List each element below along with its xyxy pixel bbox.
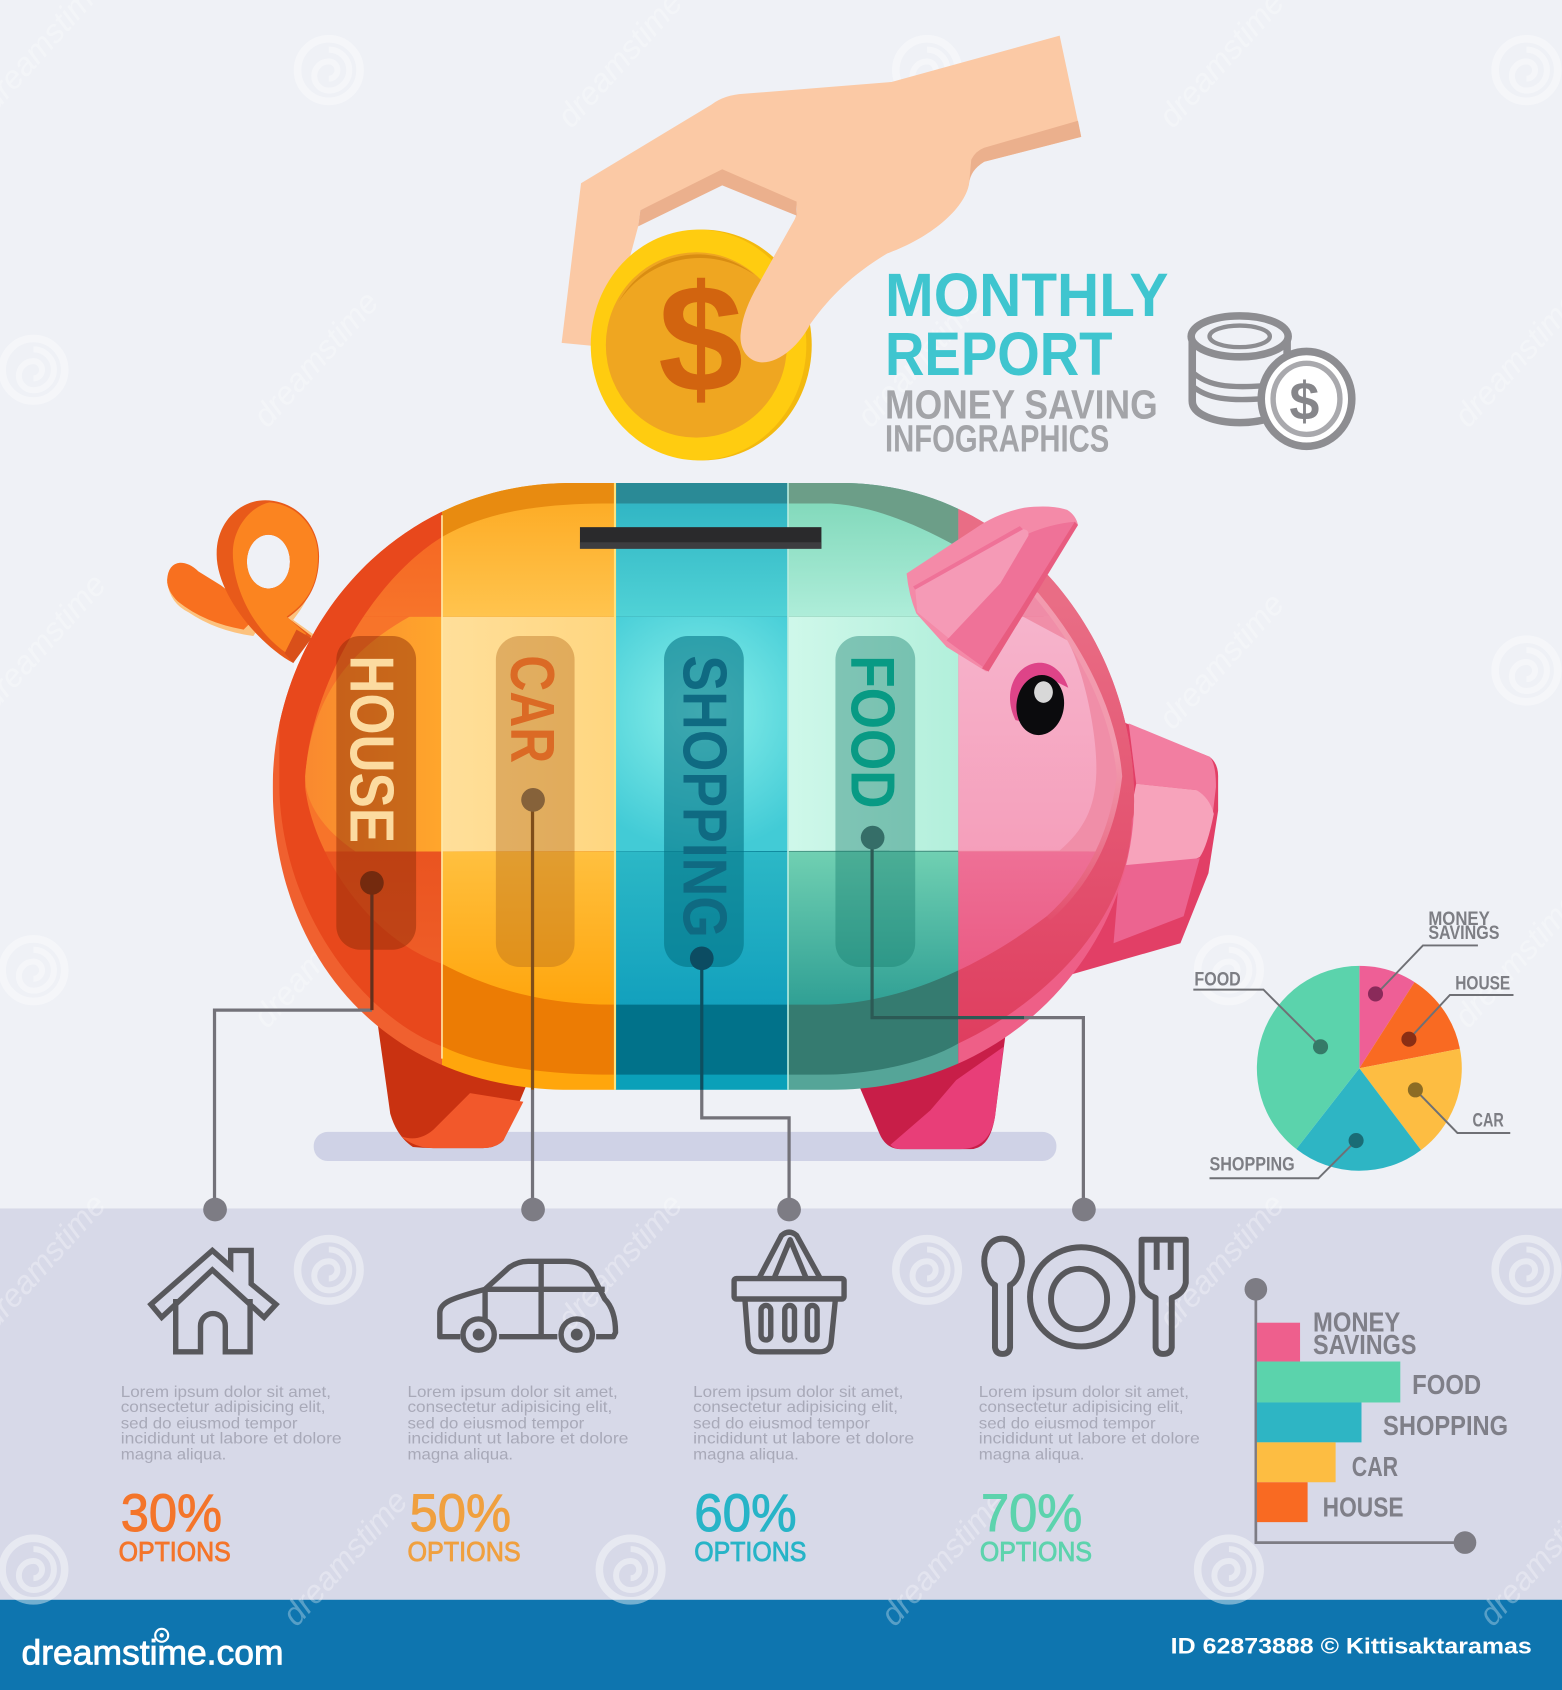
- pie labels: MONEY: [1428, 908, 1490, 930]
- text block: car: magna aliqua.: [407, 1447, 513, 1464]
- pig ear: [907, 507, 1078, 672]
- pie labels: SAVINGS: [1428, 922, 1500, 944]
- text block: car: sed do eiusmod tempor: [407, 1415, 584, 1432]
- label: FOOD: FOOD: [838, 655, 908, 809]
- pie labels: FOOD: [1194, 968, 1241, 990]
- footer: site name: dreamstime.com: [22, 1632, 284, 1672]
- pig snout: [1067, 721, 1218, 976]
- text block: house: [121, 1384, 342, 1464]
- icon: hand holding coin: [562, 36, 1081, 460]
- connector: food: [861, 826, 1096, 1221]
- slice: car: [1359, 1049, 1462, 1150]
- label: CAR: CAR: [497, 655, 567, 763]
- text block: car: Lorem ipsum dolor sit amet,: [407, 1384, 618, 1401]
- text block: house: consectetur adipisicing elit,: [121, 1399, 326, 1416]
- connector: car: [521, 788, 545, 1221]
- pie labels: SHOPPING: [1209, 1154, 1295, 1176]
- bar: money savings: [1257, 1323, 1300, 1362]
- watermark pattern: dreamstime: [1151, 1186, 1291, 1336]
- watermark pattern: dreamstime: [246, 284, 386, 434]
- pie chart: [1193, 908, 1513, 1178]
- title: MONTHLY: [885, 261, 1169, 330]
- bar chart: [1245, 1278, 1508, 1554]
- thumb over the coin: [740, 183, 969, 362]
- bar: house: [1257, 1482, 1308, 1522]
- watermark pattern: dreamstime: [246, 885, 386, 1034]
- bar labels: FOOD: [1412, 1369, 1481, 1400]
- bar labels: SAVINGS: [1313, 1329, 1416, 1360]
- coin slot: [580, 527, 821, 549]
- connector: shopping: [690, 946, 801, 1221]
- watermark pattern: dreamstime: [849, 284, 989, 434]
- stat: 30% options: [119, 1484, 231, 1567]
- pie labels: HOUSE: [1455, 973, 1510, 995]
- icon: coin stack: $: [1289, 371, 1319, 431]
- label: CAR: [496, 636, 575, 967]
- right leg: [858, 1024, 1007, 1149]
- text block: food: incididunt ut labore et dolore: [979, 1430, 1200, 1447]
- bar chart axes: [1245, 1278, 1476, 1554]
- watermark pattern: dreamstime: [550, 1186, 690, 1336]
- icon: coin stack: [1191, 316, 1352, 446]
- pig eye: [1010, 663, 1068, 738]
- text block: food: Lorem ipsum dolor sit amet,: [979, 1384, 1189, 1401]
- text block: car: [407, 1384, 628, 1464]
- connector: house: [203, 871, 384, 1221]
- label: HOUSE: HOUSE: [336, 655, 406, 843]
- text block: food: consectetur adipisicing elit,: [979, 1399, 1184, 1416]
- text block: food: [979, 1384, 1200, 1464]
- stat: 70% options: 70%: [981, 1484, 1082, 1543]
- icon: spoon, plate, fork: [984, 1239, 1186, 1354]
- pie labels: [1194, 908, 1510, 1176]
- label: HOUSE: [336, 636, 416, 950]
- stat: 60% options: 60%: [694, 1484, 797, 1543]
- pie labels: CAR: [1473, 1110, 1504, 1132]
- lower band: [0, 1208, 1562, 1600]
- stat: 70% options: [980, 1484, 1092, 1567]
- bar labels: CAR: [1352, 1451, 1398, 1482]
- slice: money savings: [1359, 966, 1415, 1068]
- pie leader lines: [1193, 945, 1513, 1178]
- bar labels: [1313, 1306, 1508, 1523]
- stat: 30% options: 30%: [121, 1484, 222, 1543]
- text block: shopping: [693, 1384, 914, 1464]
- text block: house: incididunt ut labore et dolore: [121, 1430, 342, 1447]
- bar labels: HOUSE: [1323, 1492, 1404, 1523]
- bar: food: [1257, 1362, 1400, 1402]
- stat: 50% options: OPTIONS: [407, 1536, 521, 1567]
- pig body stripes: [259, 474, 1152, 1100]
- text block: shopping: magna aliqua.: [693, 1447, 799, 1464]
- footer bar: [0, 1600, 1562, 1690]
- text block: house: magna aliqua.: [121, 1447, 226, 1464]
- text block: food: magna aliqua.: [979, 1447, 1084, 1464]
- footer: image id: ID 62873888 © Kittisaktaramas: [1171, 1634, 1532, 1659]
- slice: house: [1359, 982, 1460, 1068]
- bar labels: MONEY: [1313, 1306, 1401, 1337]
- label: FOOD: [835, 636, 915, 967]
- stat: 30% options: OPTIONS: [119, 1536, 231, 1567]
- watermark pattern: dreamstime: [275, 1483, 415, 1632]
- watermark pattern: dreamstime: [849, 885, 989, 1034]
- title: [885, 261, 1169, 460]
- stat: 60% options: OPTIONS: [694, 1536, 806, 1567]
- stat: 50% options: 50%: [410, 1484, 511, 1543]
- slice: shopping: [1296, 1068, 1421, 1171]
- label: SHOPPING: SHOPPING: [669, 655, 739, 938]
- stat: 50% options: [407, 1484, 521, 1567]
- bar: car: [1257, 1442, 1336, 1482]
- text block: food: sed do eiusmod tempor: [979, 1415, 1156, 1432]
- icon: gold coin: $: [658, 253, 743, 424]
- pig tail: [167, 500, 319, 663]
- bar: shopping: [1257, 1402, 1361, 1442]
- text block: car: incididunt ut labore et dolore: [407, 1430, 628, 1447]
- text block: shopping: Lorem ipsum dolor sit amet,: [693, 1384, 903, 1401]
- text block: house: sed do eiusmod tempor: [121, 1415, 298, 1432]
- stat: 70% options: OPTIONS: [980, 1536, 1092, 1567]
- title: MONEY SAVING: [885, 381, 1158, 427]
- left leg: [376, 1013, 527, 1148]
- watermark pattern: dreamstime: [873, 1483, 1013, 1632]
- stat: 60% options: [694, 1484, 806, 1567]
- slice: food: [1257, 966, 1359, 1149]
- text block: house: Lorem ipsum dolor sit amet,: [121, 1384, 331, 1401]
- icon: basket: [734, 1232, 844, 1352]
- text block: shopping: incididunt ut labore et dolore: [693, 1430, 914, 1447]
- icon: car: [440, 1261, 616, 1350]
- title: INFOGRAPHICS: [885, 418, 1109, 460]
- watermark pattern: dreamstime: [550, 586, 690, 736]
- watermark pattern: dreamstime: [1151, 586, 1291, 736]
- title: REPORT: [885, 320, 1112, 389]
- piggy bank illustration: [167, 474, 1218, 1149]
- text block: shopping: sed do eiusmod tempor: [693, 1415, 870, 1432]
- text block: car: consectetur adipisicing elit,: [407, 1399, 612, 1416]
- bar labels: SHOPPING: [1383, 1410, 1508, 1441]
- icon: house: [151, 1250, 276, 1352]
- ground shadow: [314, 1132, 1056, 1161]
- text block: shopping: consectetur adipisicing elit,: [693, 1399, 898, 1416]
- pie dots: [1313, 986, 1423, 1148]
- icon: gold coin: [591, 230, 812, 460]
